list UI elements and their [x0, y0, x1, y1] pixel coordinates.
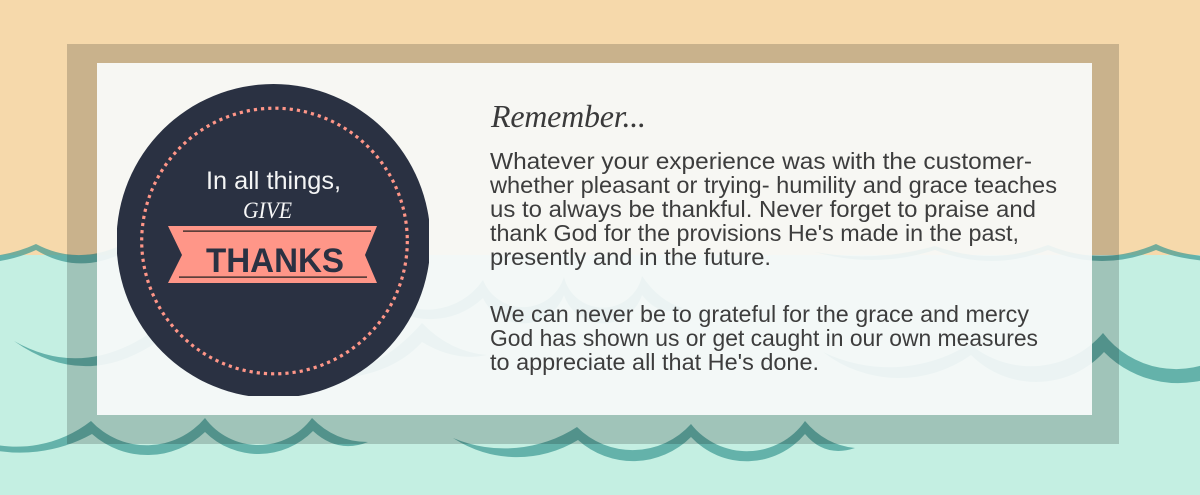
- background: sand: [0, 0, 1200, 255]
- badge text: give: GIVE: [243, 198, 292, 223]
- text block: first paragraph: [489, 148, 1057, 270]
- text block: second paragraph: to appreciate all that He's done.: [490, 349, 819, 375]
- wave: top right: [815, 244, 1200, 262]
- heading: remember: Remember...: [490, 98, 646, 134]
- wave: middle right: [823, 333, 1200, 383]
- badge: [116, 84, 430, 398]
- text block: second paragraph: God has shown us or get caught in our own measures: [490, 325, 1038, 351]
- badge circle: [116, 84, 430, 398]
- wave: middle centre upper: [380, 276, 683, 323]
- wave: middle left: [14, 300, 190, 366]
- ribbon bottom line: [179, 276, 367, 278]
- frame: [67, 44, 1119, 444]
- text block: first paragraph: whether pleasant or trying- humility and grace teaches: [489, 172, 1057, 198]
- badge text: in all things: In all things,: [206, 167, 341, 195]
- text block: first paragraph: presently and in the future.: [490, 244, 771, 270]
- ribbon text: thanks: THANKS: [206, 242, 344, 280]
- ribbon: [168, 226, 377, 283]
- ribbon shape: [168, 226, 377, 283]
- text block: first paragraph: us to always be thankful. Never forget to praise and: [490, 196, 1036, 222]
- dotted ring: [142, 108, 407, 374]
- wave: bottom left: [0, 418, 368, 455]
- waves: [0, 235, 1200, 461]
- wave: middle centre lower: [340, 323, 487, 378]
- wave: bottom centre: [453, 421, 855, 461]
- ribbon top line: [183, 230, 371, 232]
- text block: second paragraph: We can never be to grateful for the grace and mercy: [490, 301, 1029, 327]
- text block: second paragraph: [490, 301, 1038, 375]
- text block: first paragraph: Whatever your experience was with the customer-: [490, 148, 1032, 174]
- text block: first paragraph: thank God for the provisions He's made in the past,: [490, 220, 1019, 246]
- panel: [97, 63, 1092, 415]
- background: sea: [0, 255, 1200, 495]
- wave: top left: [0, 235, 140, 263]
